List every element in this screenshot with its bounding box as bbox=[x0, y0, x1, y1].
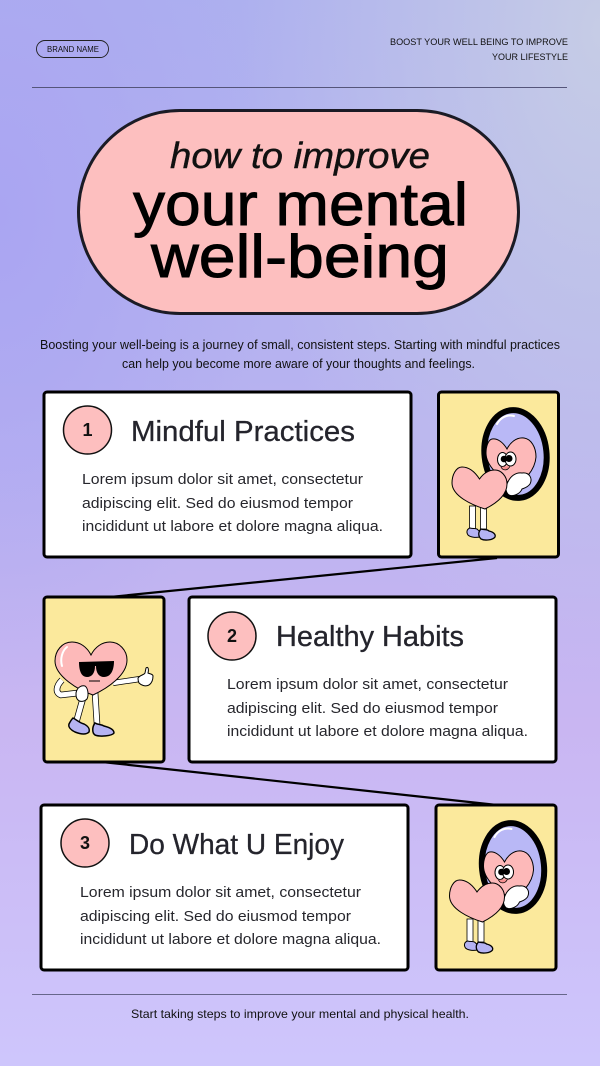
heading 3: Do What U Enjoy bbox=[129, 829, 344, 861]
right hand bbox=[138, 667, 153, 686]
title line 2: well-being bbox=[150, 223, 449, 290]
body 3: incididunt ut labore et dolore magna aliqua. bbox=[80, 931, 381, 948]
heart bbox=[55, 642, 127, 695]
body 2 bbox=[227, 676, 528, 740]
number 3: 3 bbox=[80, 833, 90, 853]
title line 1: your mental bbox=[133, 171, 468, 238]
header tagline: BOOST YOUR WELL BEING TO IMPROVE bbox=[390, 37, 568, 47]
brand pill: BRAND NAME bbox=[47, 45, 99, 54]
brand pill bbox=[36, 40, 108, 58]
intro text: Boosting your well-being is a journey of small, consistent steps. Starting with mindful practices bbox=[40, 338, 560, 352]
image panel 2: heart with sunglasses bbox=[44, 597, 164, 762]
number 1: 1 bbox=[82, 420, 93, 440]
body 3 bbox=[80, 884, 381, 948]
left hand bbox=[76, 686, 88, 701]
card 2: healthy habits bbox=[189, 597, 556, 762]
right arm bbox=[113, 679, 140, 683]
image panel 1: heart with mirror bbox=[438, 392, 558, 557]
number 3 bbox=[61, 819, 109, 867]
intro text: can help you become more aware of your thoughts and feelings. bbox=[122, 357, 475, 371]
header tagline: YOUR LIFESTYLE bbox=[492, 52, 568, 62]
header tagline bbox=[390, 37, 568, 62]
body 1 bbox=[82, 471, 383, 535]
body 2: Lorem ipsum dolor sit amet, consectetur bbox=[227, 676, 508, 693]
title kicker: how to improve bbox=[170, 135, 430, 176]
intro text bbox=[40, 338, 560, 371]
mouth bbox=[89, 680, 100, 682]
sunglasses bbox=[79, 661, 114, 677]
shoes bbox=[69, 718, 89, 734]
card 3: do what u enjoy bbox=[41, 805, 408, 970]
connector line 1 bbox=[110, 558, 497, 597]
body 1: incididunt ut labore et dolore magna aliqua. bbox=[82, 518, 383, 535]
left arm bbox=[57, 680, 78, 695]
body 2: incididunt ut labore et dolore magna aliqua. bbox=[227, 723, 528, 740]
image panel 3: heart with mirror bbox=[436, 805, 556, 970]
number 1 bbox=[64, 406, 112, 454]
body 3: Lorem ipsum dolor sit amet, consectetur bbox=[80, 884, 361, 901]
number 2 bbox=[208, 612, 256, 660]
body 3: adipiscing elit. Sed do eiusmod tempor bbox=[80, 908, 351, 925]
footer text: Start taking steps to improve your mental and physical health. bbox=[131, 1007, 469, 1021]
connector line 2 bbox=[102, 762, 497, 805]
heading 1: Mindful Practices bbox=[131, 416, 355, 448]
title panel bbox=[78, 110, 518, 314]
legs bbox=[76, 698, 83, 723]
number 2: 2 bbox=[227, 626, 237, 646]
heading 2: Healthy Habits bbox=[276, 621, 464, 653]
body 1: Lorem ipsum dolor sit amet, consectetur bbox=[82, 471, 363, 488]
body 1: adipiscing elit. Sed do eiusmod tempor bbox=[82, 495, 353, 512]
card 1: mindful practices bbox=[44, 392, 411, 557]
body 2: adipiscing elit. Sed do eiusmod tempor bbox=[227, 700, 498, 717]
